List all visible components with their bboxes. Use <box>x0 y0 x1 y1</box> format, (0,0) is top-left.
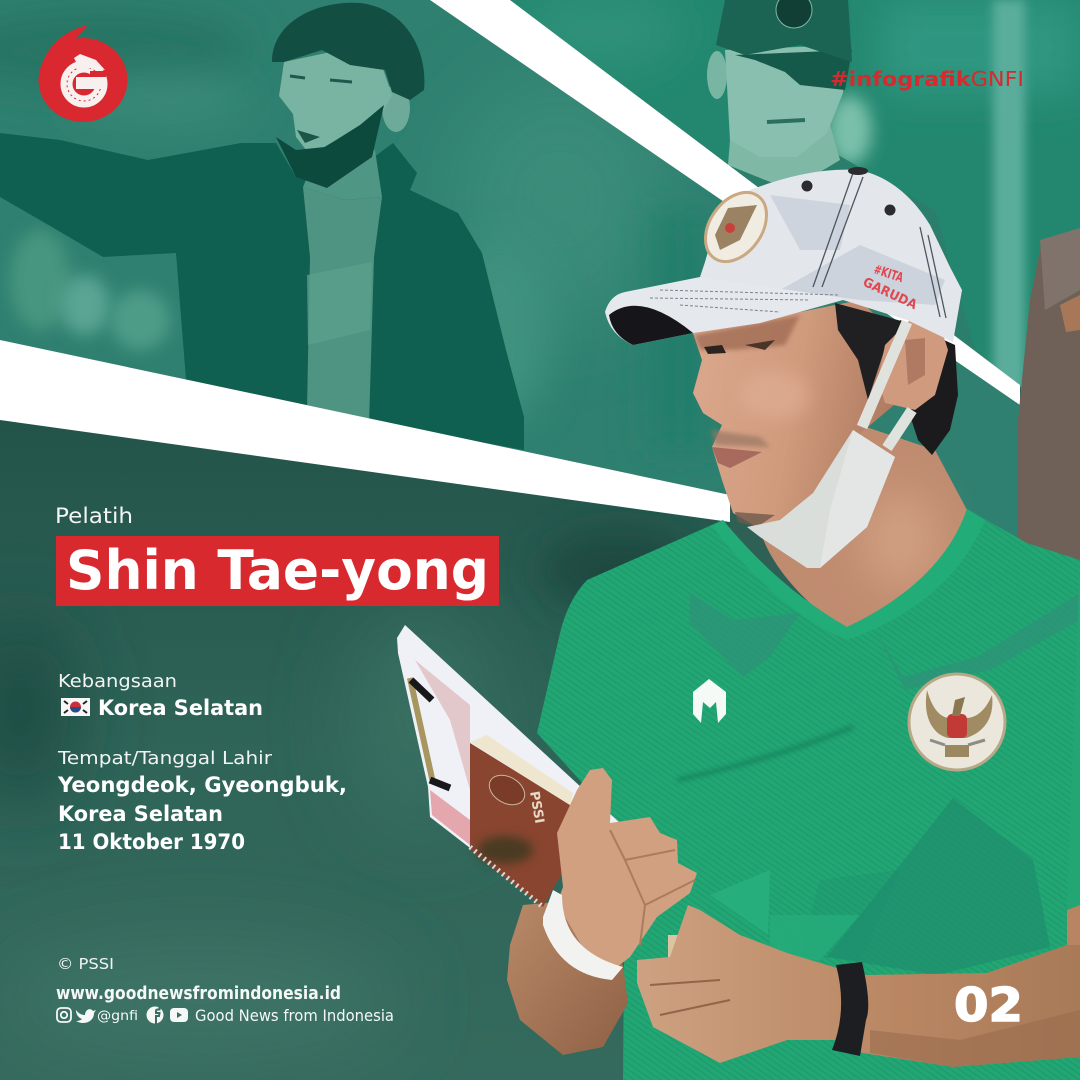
cap brim <box>605 277 845 345</box>
person at right edge <box>1017 228 1080 570</box>
brim underside <box>609 306 693 345</box>
social media row <box>57 1006 394 1025</box>
stubble <box>712 430 770 447</box>
cap shadow on face <box>735 50 852 90</box>
jersey brand logo <box>693 679 726 723</box>
neck <box>303 150 382 200</box>
hashtag: #infografik GNFI <box>830 67 1024 91</box>
ear <box>878 320 948 410</box>
red book <box>470 743 575 907</box>
text: birth place and date: Korea Selatan <box>58 802 223 826</box>
sleeve right <box>1040 680 1080 910</box>
left hand <box>557 768 697 967</box>
text: nationality label: Kebangsaan <box>58 671 177 692</box>
text: channel: Good News from Indonesia <box>195 1006 394 1025</box>
white wristband <box>543 890 623 980</box>
jacket and outstretched arm <box>0 133 524 450</box>
text: nationality: Korea Selatan <box>98 696 263 720</box>
text: birth place and date: 11 Oktober 1970 <box>58 830 245 854</box>
icon: youtube <box>170 1008 188 1022</box>
logo: GNFI <box>38 25 128 122</box>
text: birth place and date <box>57 773 347 854</box>
cap <box>716 0 852 62</box>
series number: 02 <box>954 978 1023 1032</box>
hair at temple <box>835 303 905 400</box>
ear <box>707 51 727 99</box>
face <box>279 50 392 155</box>
mask straps <box>862 322 912 448</box>
clipboard papers <box>397 625 620 848</box>
book emblem <box>484 769 530 811</box>
icon: South Korea flag <box>61 698 90 716</box>
left arm below sleeve <box>507 900 628 1055</box>
lips <box>712 447 762 468</box>
name banner: Shin Tae-yong <box>66 539 489 602</box>
text: handle: @gnfi <box>97 1008 138 1024</box>
neck <box>760 425 967 632</box>
text: website: www.goodnewsfromindonesia.id <box>56 983 341 1004</box>
jersey pattern <box>530 510 1080 1080</box>
lowered face mask <box>747 430 895 568</box>
main subject: coach Shin Tae-yong <box>397 167 1080 1080</box>
text: birth place and date: Yeongdeok, Gyeongbuk, <box>57 773 347 797</box>
icon: facebook <box>146 1006 164 1024</box>
cap badge: garuda <box>693 181 779 273</box>
cap badge <box>776 0 812 28</box>
icon: twitter <box>76 1009 96 1023</box>
clip <box>410 678 450 788</box>
white diagonal band, left <box>0 340 730 522</box>
main subject: coach Shin Tae-yong: PSSI <box>526 790 546 825</box>
ear <box>382 84 410 132</box>
panel: upper-right photo background <box>510 0 1080 389</box>
cap embroidery: Kita Garuda <box>860 263 919 313</box>
lowered face mask <box>276 105 384 188</box>
brim shadow and eyes <box>694 315 800 350</box>
eyes and mouth <box>290 76 352 82</box>
book edge under hands <box>668 935 688 965</box>
black fitness band <box>832 962 868 1056</box>
jersey <box>537 509 1080 1080</box>
right forearm and hand <box>637 905 1080 1067</box>
collar <box>712 509 985 640</box>
back hair <box>900 320 958 455</box>
garuda crest badge <box>909 674 1005 770</box>
cap embroidery: Kita Garuda: #KITA <box>872 263 905 286</box>
shirt <box>700 155 975 350</box>
cap crown <box>693 170 962 342</box>
text: photo credit: © PSSI <box>57 955 114 973</box>
mouth <box>767 120 805 122</box>
panel: upper-left photo background <box>0 0 1020 538</box>
text: Pelatih: Pelatih <box>55 504 133 528</box>
text: birth place and date label: Tempat/Tanggal Lahir <box>57 748 273 769</box>
neck <box>728 126 840 182</box>
photo: coach in cap, back figure <box>700 0 975 350</box>
cap embroidery: Kita Garuda: GARUDA <box>860 275 919 313</box>
spiral binding <box>470 847 543 907</box>
photo: coach pointing with jacket <box>0 3 524 450</box>
t-shirt <box>303 187 382 425</box>
face <box>693 300 900 527</box>
white diagonal band, upper right <box>430 0 1020 405</box>
cap eyelets and button <box>802 167 896 216</box>
panel: lower background <box>0 420 740 1080</box>
icon: instagram <box>57 1008 71 1022</box>
face <box>725 45 845 157</box>
hair <box>272 3 424 100</box>
